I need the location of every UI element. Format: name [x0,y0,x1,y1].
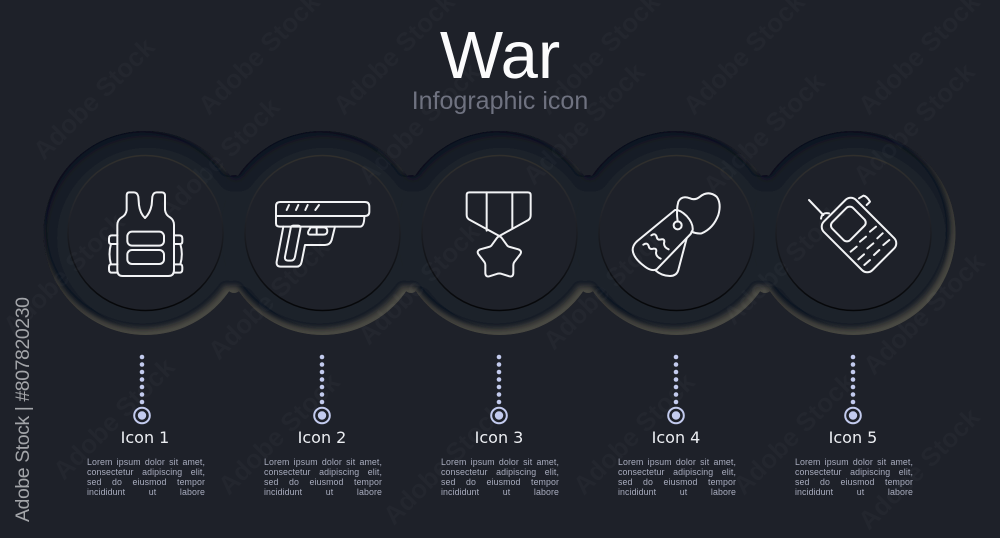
text block 2: sed do eiusmod tempor [264,477,382,487]
text block 5 [795,457,913,497]
label: Icon 3: Icon 3 [475,428,523,447]
connector 1 [134,355,150,423]
watermark text: Adobe Stock [352,216,486,350]
label: Icon 5: Icon 5 [829,428,877,447]
text block 1: incididunt ut labore [87,487,205,497]
text block 1: Lorem ipsum dolor sit amet, [87,457,205,467]
text block 3: sed do eiusmod tempor [441,477,559,487]
watermark text: Adobe Stock [847,56,981,190]
text block 2 [264,457,382,497]
text block 5: Lorem ipsum dolor sit amet, [795,457,913,467]
text block 4: consectetur adipiscing elit, [618,467,736,477]
text block 3 [441,457,559,497]
watermark text: Adobe Stock [697,66,831,200]
icon: bulletproof vest [109,192,182,276]
stock id vertical text: Adobe Stock | #807820230 [12,297,34,522]
text block 2: Lorem ipsum dolor sit amet, [264,457,382,467]
text block 1 [87,457,205,497]
text block 2: consectetur adipiscing elit, [264,467,382,477]
icon: dog tags [633,193,720,276]
text block 4: incididunt ut labore [618,487,736,497]
watermark text: Adobe Stock [212,366,346,500]
icon: pistol [276,202,369,267]
watermark text: Adobe Stock [727,366,861,500]
text block 4: Lorem ipsum dolor sit amet, [618,457,736,467]
watermark text: Adobe Stock [567,366,701,500]
text block 1: sed do eiusmod tempor [87,477,205,487]
title: War [440,18,560,93]
inner raised discs [68,156,931,310]
text block 3: incididunt ut labore [441,487,559,497]
connector 4 [668,355,684,423]
icon: medal [467,192,531,277]
watermark text: Adobe Stock [857,246,991,380]
watermark text: Adobe Stock [852,401,986,535]
text block 1: consectetur adipiscing elit, [87,467,205,477]
watermark text: Adobe Stock [0,206,131,340]
watermark text: Adobe Stock [352,56,486,190]
text block 5: consectetur adipiscing elit, [795,467,913,477]
watermark text: Adobe Stock [202,231,336,365]
circular neumorphic recessed band [44,131,956,335]
text block 3: consectetur adipiscing elit, [441,467,559,477]
connector 3 [491,355,507,423]
icon: walkie-talkie [809,195,899,275]
text block 2: incididunt ut labore [264,487,382,497]
label: Icon 4: Icon 4 [652,428,700,447]
text block 5: incididunt ut labore [795,487,913,497]
text block 5: sed do eiusmod tempor [795,477,913,487]
connector 5 [845,355,861,423]
watermark text: Adobe Stock [537,221,671,355]
watermark text: Adobe Stock [377,396,511,530]
subtitle: Infographic icon [412,87,588,115]
watermark text: Adobe Stock [517,56,651,190]
text block 4: sed do eiusmod tempor [618,477,736,487]
watermark text: Adobe Stock [27,31,161,165]
label: Icon 1: Icon 1 [121,428,169,447]
watermark text: Adobe Stock [717,196,851,330]
text block 3: Lorem ipsum dolor sit amet, [441,457,559,467]
label: Icon 2: Icon 2 [298,428,346,447]
text block 4 [618,457,736,497]
watermark text: Adobe Stock [152,91,286,225]
connector 2 [314,355,330,423]
watermark text: Adobe Stock [47,351,181,485]
